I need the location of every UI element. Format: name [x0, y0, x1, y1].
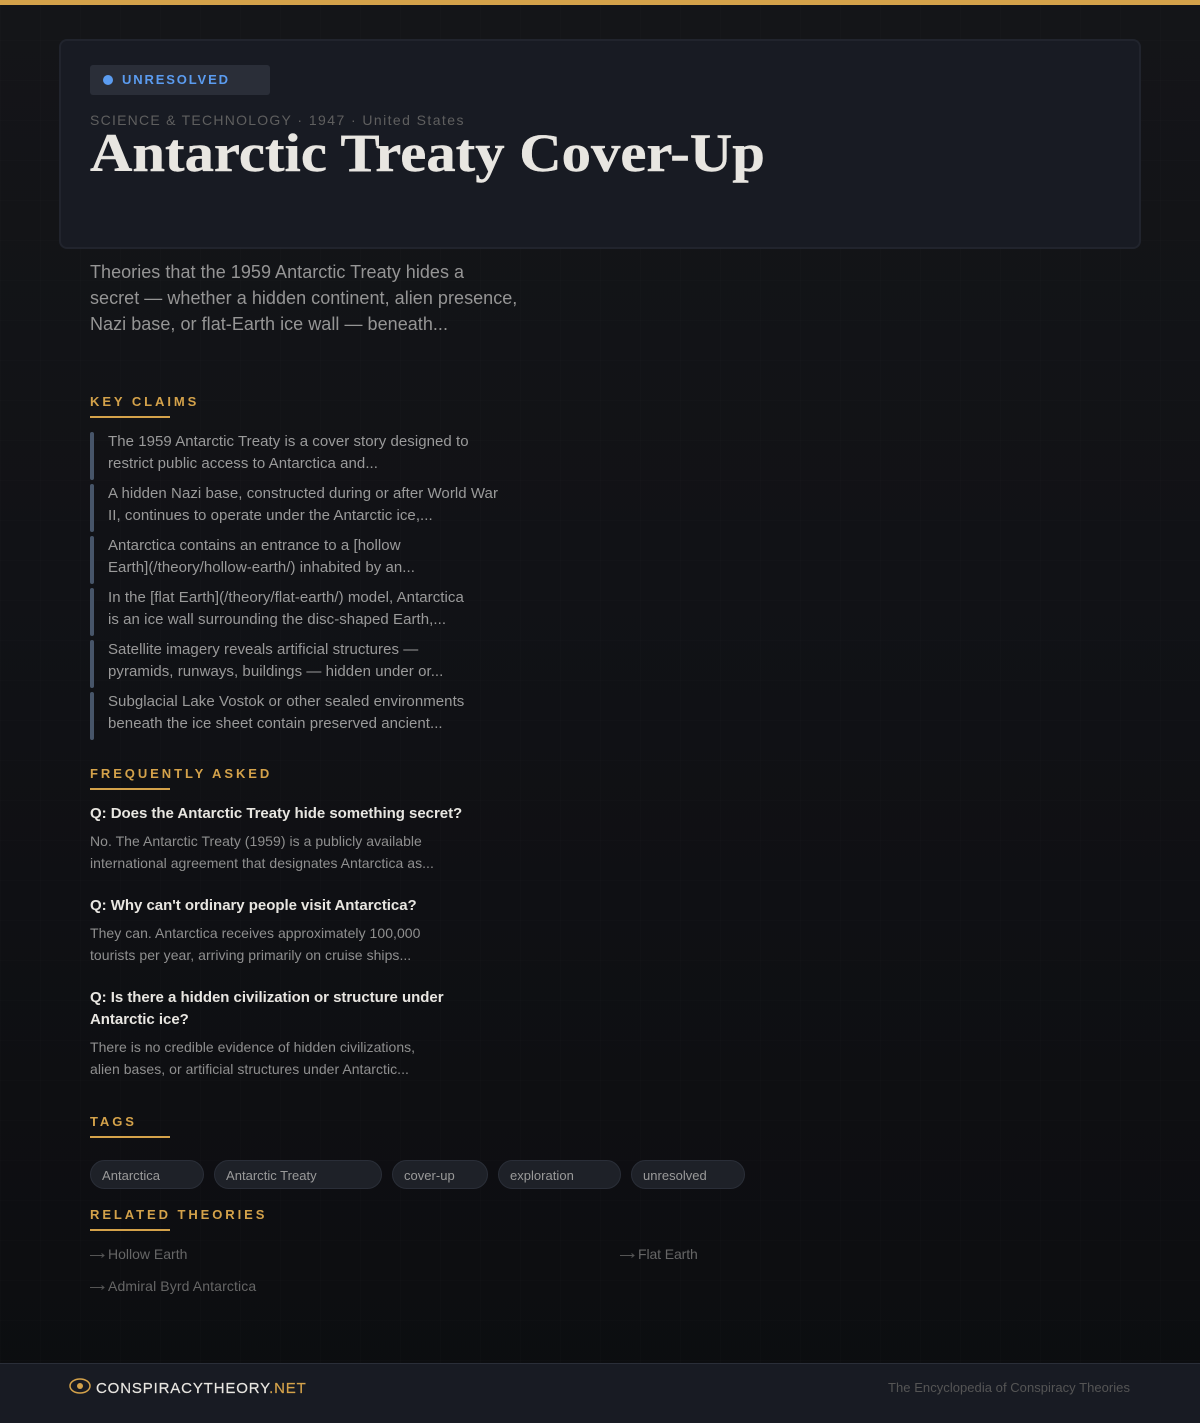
claim 6 [90, 692, 464, 740]
answer 2 [90, 925, 420, 963]
question 3: Antarctic ice? [90, 1011, 189, 1028]
intro text: secret — whether a hidden continent, alien presence, [90, 288, 517, 308]
claim 4 [90, 588, 464, 636]
header panel [59, 39, 1141, 249]
claim 5: pyramids, runways, buildings — hidden under or... [108, 663, 443, 680]
claim 1: restrict public access to Antarctica and... [108, 455, 378, 472]
related link: Hollow Earth: Hollow Earth [108, 1246, 187, 1262]
answer 2: tourists per year, arriving primarily on cruise ships... [90, 947, 411, 963]
claim 4: In the [flat Earth](/theory/flat-earth/) model, Antarctica [108, 589, 464, 606]
status badge [90, 65, 270, 95]
heading: tags: TAGS [90, 1114, 137, 1129]
tag: unresolved: unresolved [643, 1168, 707, 1183]
intro text: Nazi base, or flat-Earth ice wall — beneath... [90, 314, 448, 334]
heading: key claims: KEY CLAIMS [90, 394, 199, 409]
tag: Antarctic Treaty: Antarctic Treaty [226, 1168, 317, 1183]
top accent bar [0, 0, 1200, 5]
claim 1 [90, 432, 469, 480]
claim 6: beneath the ice sheet contain preserved ancient... [108, 715, 443, 732]
answer 1: No. The Antarctic Treaty (1959) is a publicly available [90, 833, 422, 849]
intro text: Theories that the 1959 Antarctic Treaty hides a [90, 262, 464, 282]
tag: exploration [498, 1160, 621, 1189]
answer 3 [90, 1039, 415, 1077]
tag: unresolved [631, 1160, 745, 1189]
claim 2 [90, 484, 498, 532]
badge label: UNRESOLVED [122, 72, 230, 87]
tag: Antarctica: Antarctica [102, 1168, 160, 1183]
footer tagline: The Encyclopedia of Conspiracy Theories [888, 1380, 1130, 1395]
answer 3: There is no credible evidence of hidden civilizations, [90, 1039, 415, 1055]
answer 1: international agreement that designates Antarctica as... [90, 855, 434, 871]
tag: Antarctica [90, 1160, 204, 1189]
claim 3: Earth](/theory/hollow-earth/) inhabited by an... [108, 559, 415, 576]
heading: frequently asked: FREQUENTLY ASKED [90, 766, 272, 781]
title: Antarctic Treaty Cover-Up [90, 123, 765, 183]
logo wordmark: CONSPIRACYTHEORY.NET [96, 1380, 307, 1397]
tag: exploration: exploration [510, 1168, 574, 1183]
heading: related theories: RELATED THEORIES [90, 1207, 267, 1222]
question 2: Q: Why can't ordinary people visit Antarctica? [90, 897, 417, 914]
claim 4: is an ice wall surrounding the disc-shaped Earth,... [108, 611, 446, 628]
intro text [90, 262, 517, 334]
claim 6: Subglacial Lake Vostok or other sealed environments [108, 693, 464, 710]
answer 2: They can. Antarctica receives approximately 100,000 [90, 925, 420, 941]
tag: cover-up: cover-up [404, 1168, 455, 1183]
tag: Antarctic Treaty [214, 1160, 382, 1189]
icon: eye logo [69, 1378, 91, 1394]
tag: cover-up [392, 1160, 488, 1189]
question 3: Q: Is there a hidden civilization or structure under [90, 989, 444, 1006]
claim 5: Satellite imagery reveals artificial structures — [108, 641, 418, 658]
claim 1: The 1959 Antarctic Treaty is a cover story designed to [108, 433, 469, 450]
footer [0, 1363, 1200, 1423]
related link: Flat Earth: Flat Earth [638, 1246, 698, 1262]
claim 5 [90, 640, 443, 688]
claim 3 [90, 536, 415, 584]
question 1: Q: Does the Antarctic Treaty hide something secret? [90, 805, 462, 822]
category and date line: SCIENCE & TECHNOLOGY · 1947 · United States [90, 112, 465, 128]
claim 3: Antarctica contains an entrance to a [hollow [108, 537, 401, 554]
related link: Admiral Byrd Antarctica: Admiral Byrd Antarctica [108, 1278, 256, 1294]
answer 3: alien bases, or artificial structures under Antarctic... [90, 1061, 409, 1077]
badge dot [103, 75, 113, 85]
claim 2: A hidden Nazi base, constructed during or after World War [108, 485, 498, 502]
question 3 [90, 989, 444, 1028]
claim 2: II, continues to operate under the Antarctic ice,... [108, 507, 433, 524]
answer 1 [90, 833, 434, 871]
